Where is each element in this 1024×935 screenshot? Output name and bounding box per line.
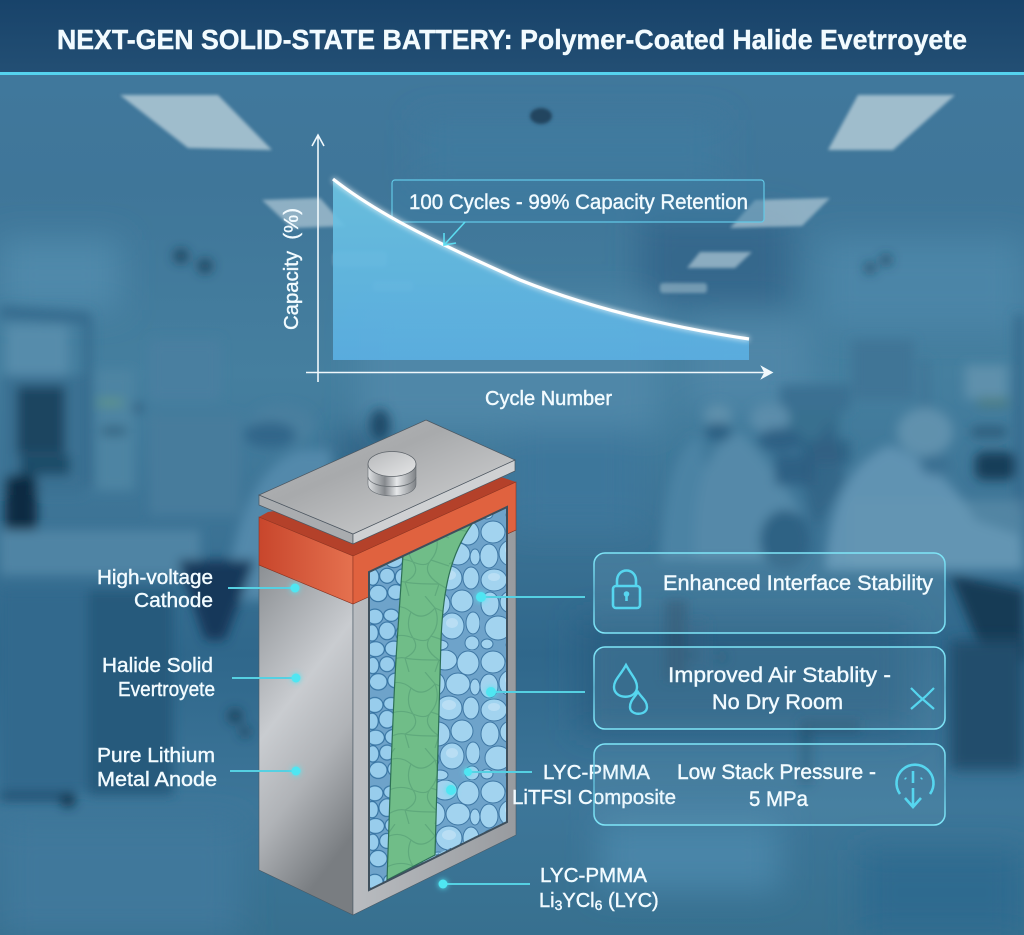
card text: Low Stack Pressure -	[677, 761, 876, 784]
label: LYC-PMMA Li3YCl6: YCl	[562, 890, 595, 912]
lab technicians	[660, 435, 720, 560]
green electrolyte band	[387, 524, 472, 880]
title banner	[0, 0, 1024, 75]
cutaway window	[369, 507, 507, 890]
icon: gauge with down arrow	[897, 765, 934, 807]
label: high-voltage cathode	[97, 567, 213, 612]
right desk shadow	[950, 575, 1024, 660]
card text: Enhanced Interface Stability	[663, 572, 934, 595]
left room frame	[0, 306, 90, 324]
label: LYC-PMMA Li3YCl6: Li	[539, 890, 555, 912]
card text	[668, 664, 891, 714]
label: LYC-PMMA LiTFSI composite	[512, 762, 676, 809]
label: halide solid electrolyte: Evertroyete	[118, 679, 215, 701]
icon: water drops	[614, 665, 647, 714]
chart area fill	[333, 179, 749, 360]
battery left face	[259, 565, 353, 915]
card text: No Dry Room	[712, 691, 843, 714]
terminal post	[368, 452, 416, 496]
panel: improved air stability	[594, 647, 945, 729]
label: LYC-PMMA LiTFSI composite: LiTFSI Composite	[512, 787, 676, 809]
label: LYC-PMMA LiTFSI composite: LYC-PMMA	[543, 762, 651, 784]
lid	[259, 420, 515, 544]
decay curve	[333, 179, 749, 339]
label: LYC-PMMA Li3YCl6: 3	[555, 897, 563, 913]
card text: Improved Air Stablity -	[668, 664, 891, 687]
label: LYC-PMMA Li3YCl6: 6	[595, 897, 603, 913]
label: halide solid electrolyte	[102, 655, 215, 701]
label: pure lithium metal anode: Metal Anode	[97, 769, 217, 791]
label: high-voltage cathode: Cathode	[134, 590, 213, 612]
label: LYC-PMMA Li3YCl6: LYC-PMMA	[540, 865, 648, 887]
battery cell cutaway	[259, 420, 516, 915]
red cathode layer	[259, 476, 516, 604]
label: pure lithium metal anode	[97, 745, 217, 791]
left figure	[225, 450, 335, 600]
card text	[677, 761, 876, 811]
battery front face	[353, 530, 516, 915]
card text: 5 MPa	[749, 788, 808, 811]
panel: enhanced interface stability	[594, 553, 945, 633]
label: high-voltage cathode: High-voltage	[97, 567, 213, 589]
label: LYC-PMMA Li3YCl6: (LYC)	[602, 890, 659, 912]
x axis label: Cycle Number	[485, 388, 612, 410]
callout lines and dots	[228, 584, 585, 888]
label: pure lithium metal anode: Pure Lithium	[97, 745, 215, 767]
capacity chart	[281, 135, 772, 410]
y axis label: Capacity (%)	[281, 208, 303, 330]
callout text: 100 Cycles - 99% Capacity Retention	[409, 191, 748, 214]
right wall cabinets	[852, 340, 914, 400]
left lower cabinets	[0, 590, 88, 790]
callout box	[392, 180, 764, 222]
panel: low stack pressure	[594, 744, 945, 825]
title text: NEXT-GEN SOLID-STATE BATTERY: Polymer-Coated Halide Evetrroyete	[57, 24, 967, 55]
label: LYC-PMMA Li3YCl6	[539, 865, 659, 913]
callout arrow	[444, 222, 465, 245]
chart x axis	[306, 367, 772, 378]
icon: cross	[911, 688, 934, 709]
chart y axis	[312, 135, 324, 382]
label: halide solid electrolyte: Halide Solid	[102, 655, 213, 677]
right cell region	[435, 507, 507, 855]
icon: lock	[613, 570, 640, 608]
